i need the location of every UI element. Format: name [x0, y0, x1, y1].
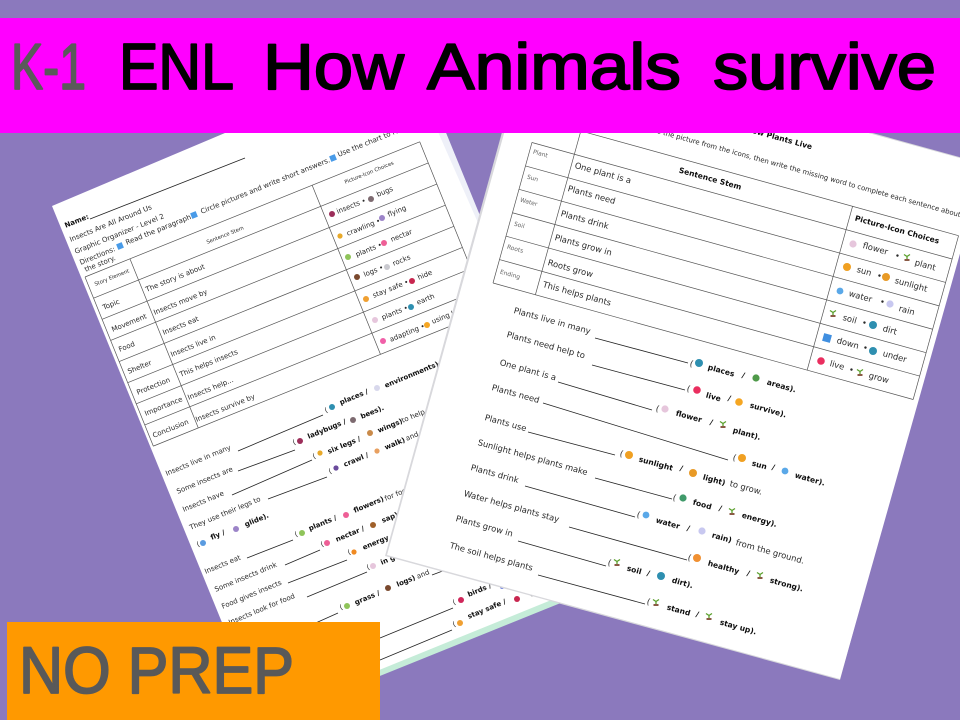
- table text: Picture-Icon Choices: [344, 160, 395, 186]
- title banner: How: [263, 30, 405, 103]
- fill-in sentences: (: [195, 540, 201, 549]
- fill-in sentences: food: [692, 498, 713, 511]
- fill-in sentences: Insects look for food: [227, 592, 296, 627]
- table text: under: [882, 348, 909, 365]
- worksheet heading: Read the paragraph.: [125, 212, 194, 247]
- fill-in sentences: environments): [383, 360, 440, 390]
- fill-in sentences: water).: [794, 471, 826, 488]
- worksheet heading: How Plants Live: [745, 124, 813, 151]
- sheet page: [52, 57, 630, 718]
- fill-in sentences: (: [686, 383, 691, 394]
- table text: flying: [387, 204, 407, 219]
- table text: water: [848, 288, 874, 304]
- fill-in sentences: Insects have: [181, 489, 225, 514]
- table text: Conclusion: [152, 418, 190, 440]
- table text: Food: [118, 340, 136, 354]
- table text: nectar: [390, 228, 413, 244]
- fill-in sentences: areas).: [766, 378, 797, 394]
- fill-in sentences: /: [771, 463, 776, 472]
- fill-in sentences: logs): [395, 574, 417, 589]
- fill-in sentences: rain): [711, 531, 733, 545]
- table text: Plants grow in: [554, 232, 613, 258]
- title banner: Animals: [427, 30, 681, 103]
- fill-in sentences: water: [655, 516, 681, 531]
- fill-in sentences: energy).: [741, 511, 778, 529]
- table text: One plant is a: [574, 160, 632, 185]
- fill-in sentences: [164, 360, 557, 660]
- fill-in sentences: (: [732, 452, 737, 463]
- fill-in sentences: (: [346, 548, 352, 557]
- title banner: survive: [713, 30, 936, 103]
- table text: This helps insects: [178, 348, 239, 379]
- fill-in sentences: (: [689, 358, 694, 369]
- fill-in sentences: (: [607, 557, 612, 568]
- table text: using body: [431, 304, 469, 326]
- fill-in sentences: Plants grow in: [455, 513, 514, 539]
- table text: •: [876, 270, 883, 281]
- fill-in sentences: dirt).: [671, 576, 694, 590]
- fill-in sentences: stay up).: [719, 618, 758, 636]
- table text: Importance: [144, 395, 184, 418]
- table text: Topic: [101, 298, 121, 312]
- table text: rain: [898, 303, 916, 317]
- table text: The story is about: [144, 263, 206, 294]
- fill-in sentences: Plants need: [491, 382, 541, 405]
- fill-in sentences: nectar /: [334, 525, 366, 544]
- fill-in sentences: healthy: [707, 559, 740, 576]
- fill-in sentences: wings): [376, 417, 404, 435]
- fill-in sentences: (: [672, 492, 677, 503]
- fill-in sentences: walk): [383, 436, 406, 452]
- fill-in sentences: plant).: [732, 426, 762, 442]
- sheet stack right edge: [400, 57, 490, 240]
- fill-in sentences: /: [746, 569, 751, 578]
- table text: Roots: [506, 244, 524, 255]
- fill-in sentences: (: [365, 563, 371, 572]
- fill-in sentences: Plants drink: [470, 462, 520, 485]
- fill-in sentences: Insects live in many: [164, 444, 232, 478]
- fill-in sentences: (: [291, 438, 297, 447]
- sheet stack bottom edge: [255, 560, 640, 720]
- fill-in sentences: flower: [675, 409, 703, 425]
- fill-in sentences: grass /: [353, 589, 381, 607]
- fill-in sentences: One plant is a: [499, 357, 557, 382]
- fill-in sentences: (: [655, 403, 660, 414]
- table text: live: [829, 358, 846, 372]
- fill-in sentences: and: [415, 568, 431, 581]
- fill-in sentences: glide).: [243, 512, 270, 529]
- fill-in sentences: survive).: [749, 401, 788, 419]
- table text: This helps plants: [541, 279, 612, 308]
- fill-in sentences: six legs /: [326, 435, 362, 456]
- fill-in sentences: /: [679, 464, 684, 473]
- table text: sunlight: [894, 275, 929, 294]
- table text: stay safe •: [372, 278, 410, 300]
- table text: earth: [416, 292, 436, 307]
- fill-in sentences: (: [338, 603, 344, 612]
- table text: plant: [914, 257, 938, 273]
- title banner: K-1: [11, 30, 86, 103]
- table text: adapting •: [389, 322, 426, 344]
- table text: Picture-Icon Choices: [854, 214, 941, 246]
- table text: Story Element: [94, 268, 130, 288]
- table text: Plants drink: [560, 208, 610, 231]
- table text: •: [848, 364, 855, 375]
- fill-in sentences: /: [686, 524, 691, 533]
- table text: insects •: [336, 197, 367, 216]
- table text: Insects survive by: [195, 393, 256, 424]
- table text: Movement: [111, 312, 148, 334]
- fill-in sentences: (: [636, 509, 641, 520]
- fill-in sentences: to grow.: [729, 478, 764, 497]
- fill-in sentences: in grass: [379, 547, 411, 567]
- fill-in sentences: escape: [528, 581, 557, 599]
- fill-in sentences: /: [695, 610, 700, 619]
- fill-in sentences: energy: [361, 534, 390, 552]
- fill-in sentences: sap): [380, 511, 399, 525]
- table text: Insects eat: [162, 315, 200, 337]
- title banner: ENL: [119, 30, 234, 103]
- fill-in sentences: (: [327, 467, 333, 476]
- fill-in sentences: Food gives insects: [220, 579, 283, 611]
- table grid: [85, 142, 488, 446]
- fill-in sentences: Plants live in many: [513, 305, 592, 336]
- fill-in sentences: [448, 305, 826, 636]
- fill-in sentences: (: [319, 540, 325, 549]
- table text: Plant: [532, 149, 549, 160]
- fill-in sentences: birds /: [466, 582, 493, 599]
- fill-in sentences: /: [718, 504, 723, 513]
- table text: Plants need: [567, 183, 617, 206]
- title banner: [0, 18, 960, 133]
- fill-in sentences: places /: [338, 388, 370, 407]
- fill-in sentences: (: [451, 598, 457, 607]
- table text: Shelter: [127, 359, 153, 376]
- fill-in sentences: sun: [751, 459, 768, 471]
- table text: Insects help...: [187, 376, 235, 402]
- fill-in sentences: (: [323, 406, 329, 415]
- worksheet heading: [64, 123, 411, 274]
- table text: sun: [856, 264, 873, 278]
- fill-in sentences: /: [709, 418, 714, 427]
- table text: grow: [868, 370, 890, 385]
- fill-in sentences: soil: [626, 564, 643, 576]
- worksheet heading: Insects Are All Around Us: [69, 203, 153, 244]
- fill-in sentences: strong).: [769, 576, 804, 594]
- table text: •: [862, 342, 869, 353]
- panel: plants worksheet: [385, 38, 960, 680]
- fill-in sentences: Insects eat: [203, 554, 242, 576]
- fill-in sentences: (: [293, 530, 299, 539]
- worksheet heading: Use the chart to retell: [337, 123, 411, 159]
- table text: Protection: [136, 376, 171, 397]
- table text: [94, 160, 469, 440]
- sheet edge: [385, 38, 960, 680]
- table text: •: [894, 250, 901, 261]
- fill-in sentences: flowers): [352, 495, 385, 515]
- fill-in sentences: Some insects drink: [213, 560, 279, 594]
- fill-in sentences: (: [619, 448, 624, 459]
- panel: insects worksheet: [52, 57, 640, 720]
- fill-in sentences: plants /: [307, 514, 338, 533]
- fill-in sentences: (: [311, 452, 317, 461]
- table text: bugs: [376, 185, 395, 199]
- sheet page: [387, 40, 960, 679]
- table text: rocks: [392, 253, 412, 268]
- table text: Roots grow: [547, 257, 594, 279]
- fill-in sentences: /: [741, 371, 746, 380]
- table text: plants •: [381, 304, 409, 322]
- worksheet heading: Name:: [64, 213, 90, 230]
- table text: Insects live in: [170, 333, 217, 359]
- fill-in sentences: /: [727, 394, 732, 403]
- fill-in sentences: or: [435, 360, 445, 370]
- fill-in sentences: sunlight: [638, 455, 674, 473]
- fill-in sentences: ladybugs /: [306, 417, 348, 441]
- worksheet heading: Circle pictures and write short answers.: [200, 156, 331, 216]
- fill-in sentences: Water helps plants stay: [463, 488, 560, 524]
- fill-in sentences: stay safe /: [466, 598, 508, 621]
- fill-in sentences: They use their legs to: [188, 495, 262, 532]
- no prep badge: NO PREP: [19, 633, 294, 707]
- fill-in sentences: Plants use: [484, 412, 528, 433]
- table text: [499, 149, 941, 385]
- table text: down: [836, 335, 860, 351]
- fill-in sentences: stand: [666, 603, 691, 618]
- table text: soil: [842, 312, 858, 326]
- worksheet heading: Graphic Organizer - Level 2: [74, 212, 165, 256]
- worksheet heading: Directions:: [79, 245, 116, 267]
- fill-in sentences: for food: [383, 485, 412, 503]
- fill-in sentences: The soil helps plants: [448, 540, 534, 573]
- fill-in sentences: (: [646, 596, 651, 607]
- fill-in sentences: Some insects are: [175, 465, 234, 496]
- fill-in sentences: to help: [400, 408, 427, 425]
- worksheet heading: the story.: [84, 254, 117, 274]
- table text: flower: [862, 240, 890, 257]
- table text: plants •: [355, 241, 383, 259]
- fill-in sentences: /: [646, 569, 651, 578]
- table text: Soil: [513, 221, 526, 230]
- no prep badge: [7, 622, 380, 720]
- fill-in sentences: bees).: [359, 404, 385, 421]
- table text: •: [861, 317, 868, 328]
- table text: Sun: [526, 174, 539, 183]
- table text: crawling •: [346, 217, 382, 238]
- table text: •: [879, 296, 886, 307]
- fill-in sentences: from the ground.: [735, 537, 806, 566]
- fill-in sentences: places: [707, 363, 736, 379]
- table text: Ending: [499, 269, 521, 281]
- fill-in sentences: Sunlight helps plants make: [477, 437, 589, 477]
- table text: Sentence Stem: [678, 166, 743, 192]
- table text: logs •: [363, 264, 385, 279]
- table grid: [493, 119, 959, 400]
- fill-in sentences: live: [705, 391, 722, 403]
- fill-in sentences: and: [404, 430, 420, 443]
- fill-in sentences: light): [702, 473, 727, 488]
- table text: dirt: [882, 323, 899, 337]
- fill-in sentences: fly /: [209, 528, 227, 542]
- fill-in sentences: crawl /: [342, 451, 370, 469]
- table text: Water: [519, 197, 539, 208]
- table text: Sentence Stem: [206, 225, 245, 246]
- table text: Insects move by: [153, 288, 209, 317]
- fill-in sentences: (: [687, 552, 692, 563]
- table text: hide: [417, 269, 434, 282]
- fill-in sentences: (: [451, 620, 457, 629]
- fill-in sentences: Plants need help to: [506, 329, 586, 360]
